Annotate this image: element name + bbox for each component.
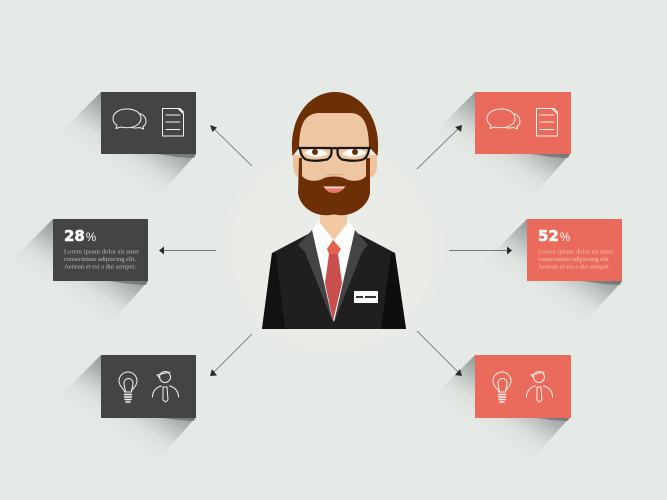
- arrow: to middle-right card: [449, 246, 512, 254]
- nose: [327, 173, 343, 176]
- lapels: [298, 230, 368, 322]
- panel: middle-right 52 percent card: [457, 219, 622, 323]
- glasses: [298, 148, 371, 161]
- mouth: [323, 186, 346, 193]
- shirt: [310, 221, 357, 322]
- icon: document: [162, 108, 184, 136]
- text block: lorem ipsum left: Lorem ipsum dolor sit amet: [64, 248, 139, 256]
- icon: person with tie: [526, 372, 552, 402]
- arrow: to bottom-right card: [417, 331, 462, 376]
- faint central circle: [215, 132, 451, 368]
- arrow: to top-right card: [417, 125, 462, 169]
- icon: light bulb: [493, 372, 511, 402]
- text block: lorem ipsum right: consectetuer adipiscing elit.: [538, 256, 610, 263]
- beard: [298, 158, 370, 215]
- text block: lorem ipsum left: consectetuer adipiscing elit.: [64, 256, 136, 263]
- tie: [325, 240, 342, 321]
- text block: lorem ipsum right: Lorem ipsum dolor sit amet: [538, 248, 613, 256]
- panel: bottom-left bulb and person card: [31, 355, 196, 459]
- name badge: [354, 291, 378, 303]
- panel: top-left chat and document card: [31, 92, 196, 196]
- stat: 28%: 28%: [64, 227, 96, 245]
- text block: lorem ipsum left: Aenean et est a dui semper.: [64, 264, 136, 270]
- panel: bottom-right bulb and person card: [405, 355, 571, 459]
- panel: middle-left 28 percent card: [0, 219, 148, 323]
- face: [299, 113, 369, 185]
- icon: speech bubbles: [113, 109, 146, 129]
- stat: 52%: 52%: [538, 227, 570, 245]
- central businessman figure: [262, 92, 406, 329]
- hair: [292, 92, 378, 156]
- icon: speech bubbles: [487, 109, 520, 129]
- neck: [318, 210, 349, 240]
- icon: light bulb: [119, 372, 137, 402]
- suit jacket: [262, 232, 406, 329]
- arrow: to top-left card: [210, 125, 252, 166]
- eyes: [304, 148, 366, 157]
- arrow: to bottom-left card: [210, 334, 252, 376]
- icon: document: [536, 108, 558, 136]
- icon: person with tie: [152, 372, 178, 402]
- ears: [293, 155, 377, 177]
- panel: top-right chat and document card: [405, 92, 571, 196]
- arrow: to middle-left card: [159, 246, 216, 254]
- text block: lorem ipsum right: Aenean et est a dui semper.: [538, 264, 610, 270]
